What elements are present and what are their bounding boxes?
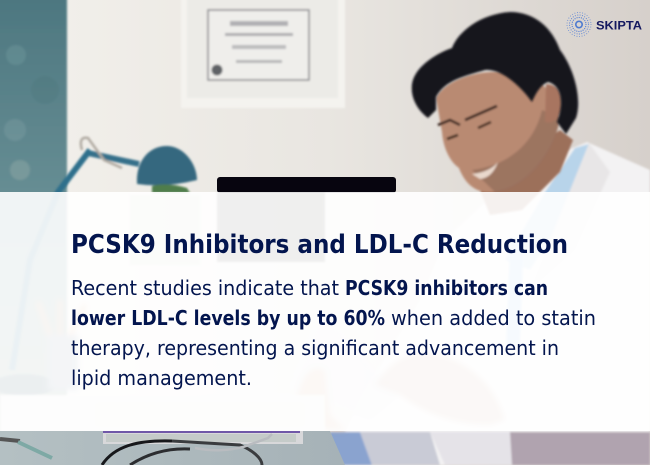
icon: dotted radial mark <box>567 12 591 36</box>
desk lamp <box>0 138 200 396</box>
body text: therapy, representing a significant advancement in <box>71 336 559 360</box>
body text <box>71 276 596 390</box>
computer monitor <box>217 177 396 193</box>
doctor hair <box>412 12 578 134</box>
body text: lower LDL-C levels by up to 60% <box>71 306 385 330</box>
pencil holder <box>38 300 85 390</box>
hands and tablet <box>290 305 505 430</box>
wordmark: SKIPTA <box>596 18 642 32</box>
body text: when added to statin <box>391 306 596 330</box>
framed certificate <box>181 0 345 108</box>
body text: PCSK9 inhibitors can <box>345 276 548 300</box>
stethoscope and reflex hammer <box>0 434 272 465</box>
translucent text panel <box>0 192 650 431</box>
window <box>0 0 67 437</box>
body text: lipid management. <box>71 366 252 390</box>
doctor coat and torso <box>325 142 650 465</box>
logo: SKIPTA <box>567 12 642 36</box>
heading: PCSK9 Inhibitors and LDL-C Reduction <box>71 230 568 260</box>
desk surface and papers <box>0 395 325 435</box>
monitor seen through panel <box>217 192 325 262</box>
body text: Recent studies indicate that <box>71 276 339 300</box>
doctor neck and face <box>436 72 573 215</box>
